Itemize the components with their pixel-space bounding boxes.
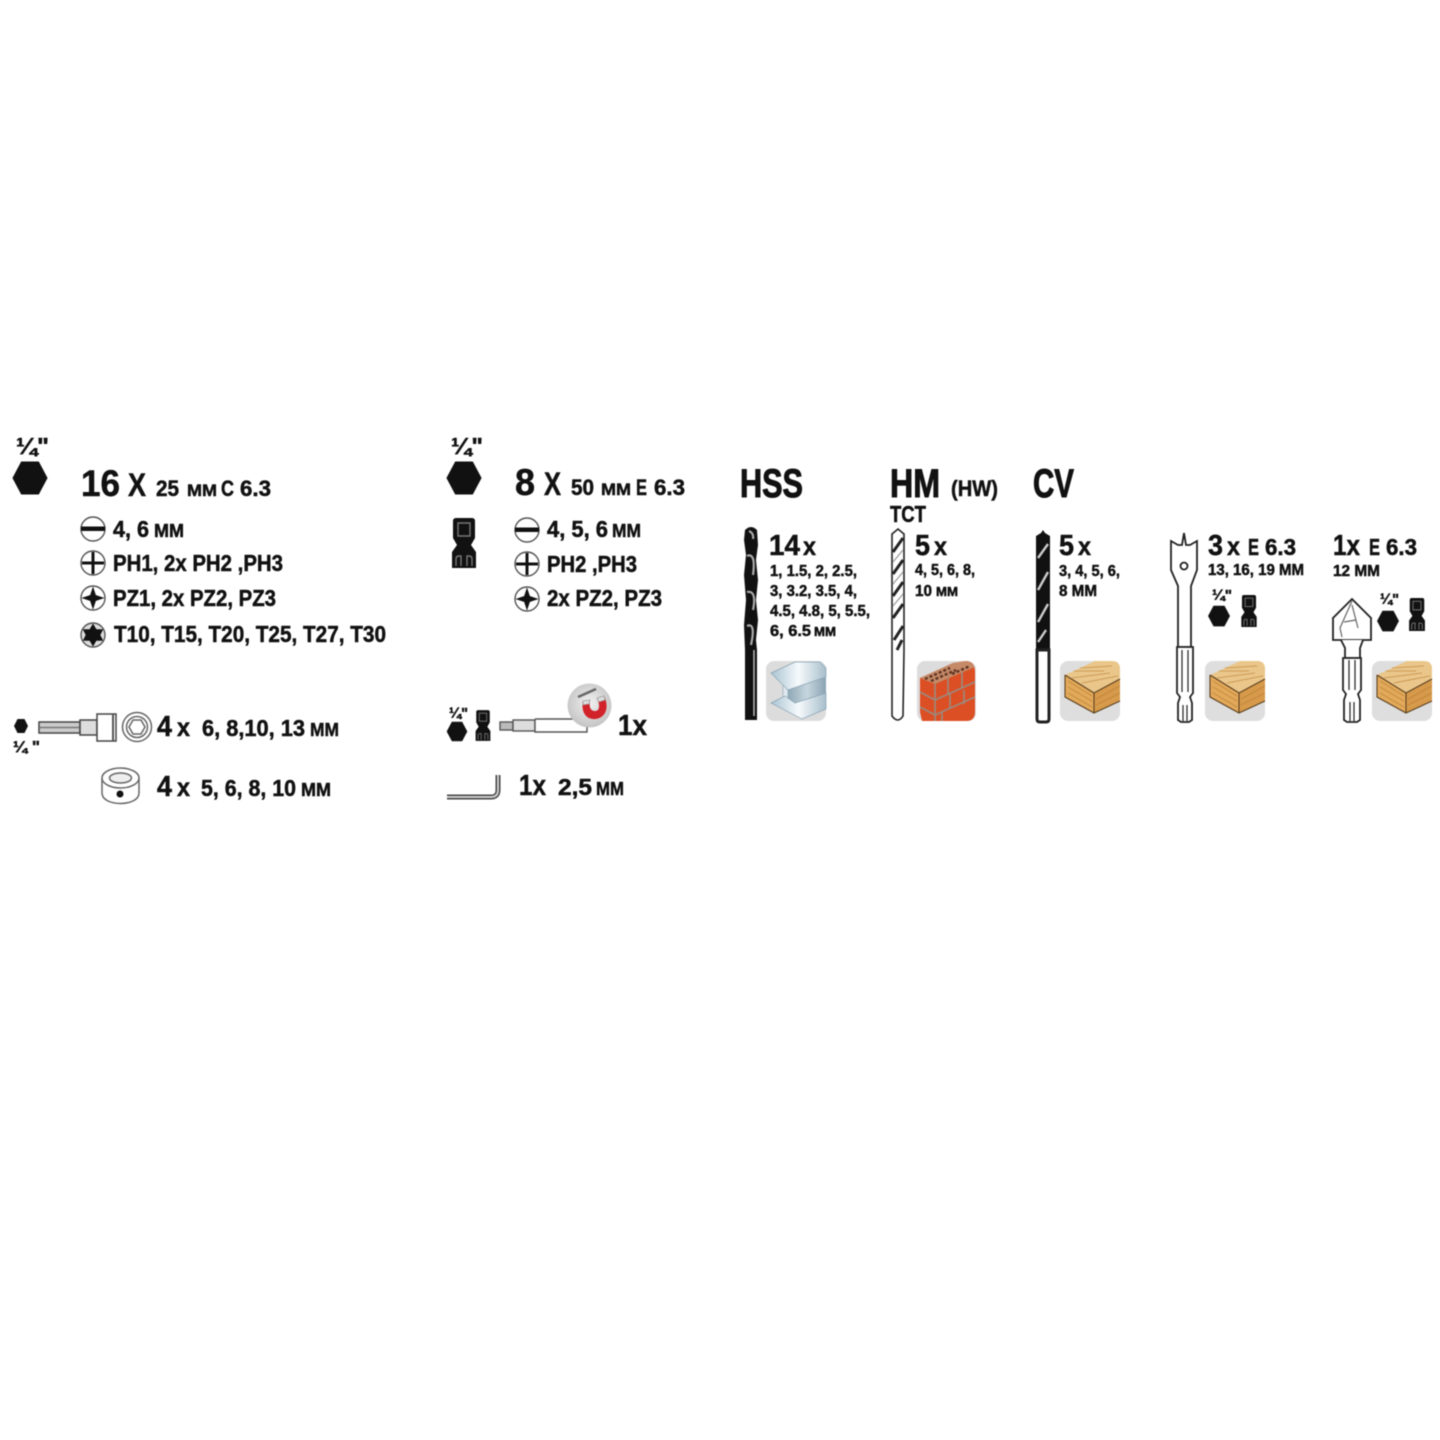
text: 1x E 6.3: 1x (1333, 530, 1360, 562)
heading: 16 x 25 mm C 6.3: 16 (81, 463, 120, 504)
label: quarter inch small: ¼" (1212, 587, 1232, 604)
icon: small quick change (1241, 595, 1257, 627)
icon: small quick change (476, 710, 490, 741)
text: HW: (HW) (951, 476, 998, 501)
text: 4x nut sizes: x (177, 714, 190, 742)
label: quarter inch small: ¼" (449, 705, 468, 722)
text: HSS sizes: 3, 3.2, 3.5, 4, (770, 583, 857, 600)
text: 5x (915, 530, 947, 562)
text: TCT: TCT (890, 501, 926, 527)
text: 1x hex key: MM (596, 779, 624, 799)
text: 5x: 5 (915, 530, 930, 562)
icon: hex shank (13, 462, 47, 494)
heading: 8 x 50 mm E 6.3: 6.3 (654, 475, 685, 500)
text: 3x E 6.3: x (1227, 531, 1240, 561)
icon: wood tile (1205, 661, 1265, 721)
text: 14x: 14 (769, 530, 800, 562)
icon: slotted (81, 517, 105, 541)
text: CV sizes: 3, 4, 5, 6, (1059, 563, 1120, 580)
icon: bit holder (500, 719, 587, 732)
text: HSS sizes: 6, 6.5 (770, 623, 811, 640)
icon: quick change shank (452, 518, 476, 568)
panel: HSS drills (740, 462, 870, 721)
text: HM sizes: 4, 5, 6, 8, (915, 562, 975, 579)
text: HSS sizes: MM (814, 624, 836, 639)
icon: slotted (515, 518, 539, 542)
text: CV sizes (1059, 563, 1120, 600)
text: HSS sizes: 4.5, 4.8, 5, 5.5, (770, 603, 870, 620)
text: slotted sizes: 4, 6 (113, 516, 149, 542)
text: 4x nut sizes: 4 (157, 711, 172, 743)
heading: 8 x 50 mm E 6.3 (515, 462, 685, 503)
icon: small hex (14, 719, 28, 733)
text: 1x hex key (519, 770, 624, 802)
panel: 50 mm bits (447, 433, 685, 611)
text: slotted sizes: MM (612, 521, 641, 541)
text: 3x E 6.3: E (1248, 534, 1259, 560)
icon: small hex (1377, 611, 1399, 631)
panel: magnetic holder and hex key (447, 684, 647, 802)
heading: 8 x 50 mm E 6.3: E (636, 475, 647, 500)
text: torx sizes: T10, T15, T20, T25, T27, T30 (114, 621, 386, 647)
text: 1x E 6.3: 6.3 (1386, 534, 1417, 560)
icon: small hex (1208, 606, 1230, 626)
text: phillips sizes: PH2 ,PH3 (547, 551, 637, 577)
text: 14x: x (803, 531, 816, 561)
text: spade sizes: 13, 16, 19 MM (1208, 562, 1304, 579)
text: HM sizes (915, 562, 975, 600)
text: 4x ring sizes: 4 (157, 771, 172, 803)
text: 5x: 5 (1059, 530, 1074, 562)
text: 1x hex key: 1x (519, 770, 546, 802)
icon: phillips (515, 552, 539, 576)
icon: phillips (81, 551, 105, 575)
heading: HSS: HSS (740, 462, 803, 506)
text: pozidriv sizes: 2x PZ2, PZ3 (547, 585, 662, 611)
heading: 8 x 50 mm E 6.3: X (544, 466, 562, 502)
text: 5x: x (934, 531, 947, 561)
text: 4x nut sizes: 6, 8,10, 13 (202, 715, 305, 741)
heading: 16 x 25 mm C 6.3: MM (187, 481, 217, 500)
icon: spade bit (1171, 533, 1197, 722)
heading: 16 x 25 mm C 6.3: 25 (156, 476, 179, 501)
icon: CV drill bit (1036, 530, 1050, 722)
text: slotted sizes: 4, 5, 6 (547, 516, 608, 542)
text: 1x E 6.3: E (1369, 534, 1380, 560)
text: 3x E 6.3: 3 (1208, 530, 1223, 562)
icon: pozidriv (515, 587, 539, 611)
text: 4x nut sizes (157, 711, 339, 743)
heading: 16 x 25 mm C 6.3 (81, 463, 271, 504)
text: pozidriv sizes: PZ1, 2x PZ2, PZ3 (113, 585, 276, 611)
heading: 16 x 25 mm C 6.3: C (221, 476, 234, 501)
heading: 16 x 25 mm C 6.3: X (128, 467, 147, 503)
text: 4x ring sizes: MM (301, 780, 331, 800)
heading: HM: HM (890, 462, 940, 506)
text: slotted sizes: MM (154, 521, 184, 541)
icon: HSS drill bit (744, 527, 758, 720)
text: 1x hex key: 2,5 (558, 774, 592, 800)
icon: wood tile (1060, 661, 1120, 721)
label: quarter inch small: ¼" (1380, 591, 1399, 608)
icon: pozidriv (81, 586, 105, 610)
icon: HM drill bit (892, 529, 904, 720)
text: 14x (769, 530, 816, 562)
text: 4x ring sizes: x (177, 774, 190, 802)
icon: hex key (447, 775, 498, 797)
icon: magnet lens (568, 684, 612, 728)
icon: hex shank (447, 462, 481, 494)
heading: CV: CV (1033, 462, 1074, 506)
text: HM sizes: 10 (915, 583, 932, 600)
panel: spade bits (1171, 530, 1304, 722)
text: HSS sizes: 1, 1.5, 2, 2.5, (770, 563, 857, 580)
panel: 25 mm bits (13, 433, 386, 647)
panel: countersink (1333, 530, 1432, 722)
panel: HM drills (890, 462, 998, 721)
text: HM sizes: MM (936, 584, 958, 599)
heading: 16 x 25 mm C 6.3: 6.3 (240, 476, 271, 501)
panel: CV wood drills (1033, 462, 1120, 722)
text: 1x E 6.3 (1333, 530, 1417, 562)
heading: 8 x 50 mm E 6.3: MM (601, 480, 631, 499)
text: countersink size: 12 MM (1333, 563, 1380, 580)
label: quarter inch: ¼" (451, 433, 483, 459)
icon: steel beam tile (766, 661, 826, 721)
icon: countersink bit (1333, 599, 1371, 722)
heading: 8 x 50 mm E 6.3: 50 (571, 475, 594, 500)
text: 4x ring sizes: 5, 6, 8, 10 (201, 775, 296, 801)
icon: wood tile (1372, 661, 1432, 721)
text: 5x: x (1078, 531, 1091, 561)
text: slotted sizes (113, 516, 184, 542)
text: slotted sizes (547, 516, 641, 542)
text: HSS sizes (770, 563, 870, 640)
text: 3x E 6.3 (1208, 530, 1296, 562)
icon: small quick change (1409, 598, 1425, 631)
icon: torx (81, 623, 105, 647)
icon: small hex (447, 722, 467, 741)
icon: depth stop ring (102, 768, 139, 804)
text: 4x ring sizes (157, 771, 331, 803)
text: 4x nut sizes: MM (310, 720, 339, 740)
text: 1x holder: 1x (618, 710, 647, 742)
text: CV sizes: 8 MM (1059, 583, 1097, 600)
panel: nut setters (13, 711, 339, 804)
icon: nut setter (39, 714, 116, 741)
icon: brick tile (917, 661, 976, 721)
text: phillips sizes: PH1, 2x PH2 ,PH3 (113, 550, 283, 576)
label: quarter inch: ¼" (16, 433, 49, 459)
text: 5x (1059, 530, 1091, 562)
icon: nut end view (122, 712, 152, 742)
text: 3x E 6.3: 6.3 (1265, 534, 1296, 560)
label: quarter inch small: ¼ " (13, 739, 40, 756)
heading: 8 x 50 mm E 6.3: 8 (515, 462, 535, 503)
